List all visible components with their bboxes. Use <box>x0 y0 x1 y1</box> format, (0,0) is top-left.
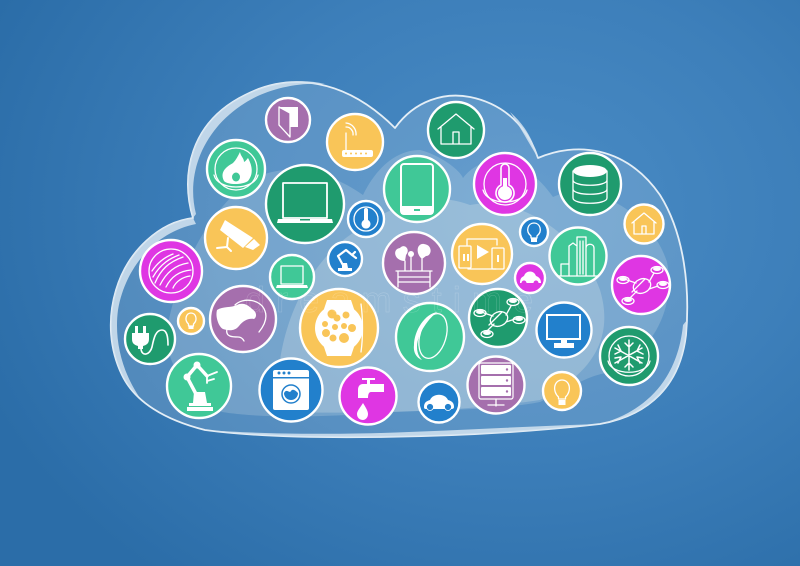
icon: VR headset <box>210 286 276 352</box>
icon: bulb yellow right <box>543 372 581 410</box>
icon: car blue <box>418 382 460 422</box>
icon: water tap <box>340 368 396 424</box>
icon: washing machine <box>260 358 322 422</box>
icon: robot arm teal <box>167 354 231 418</box>
icon: flame button <box>207 140 265 198</box>
icon: door <box>266 98 310 142</box>
icon: security camera <box>205 207 267 269</box>
icon: ring lens <box>396 303 464 371</box>
icon: smartwatch <box>300 289 378 367</box>
icon: media devices <box>452 224 512 284</box>
icon: small house <box>624 204 664 244</box>
icon: small car magenta <box>515 263 545 293</box>
cloud outline <box>111 82 687 437</box>
icon: robot arm blue <box>328 242 362 276</box>
icon: snowflake button <box>600 327 658 385</box>
icon: thermometer magenta <box>474 153 536 215</box>
icon: drone magenta <box>612 256 670 314</box>
icon: server rack <box>468 356 524 414</box>
icon: laptop small <box>270 255 314 299</box>
cloud shape <box>111 81 687 437</box>
watermark text: dreamstime <box>245 279 535 320</box>
icon: monitor <box>536 302 592 358</box>
icon: database <box>559 153 621 215</box>
icon: bulb small yellow <box>178 308 204 334</box>
icon: laptop large <box>266 165 344 243</box>
icon: city buildings <box>550 228 606 284</box>
icon: drone green <box>469 289 527 347</box>
icon: radar <box>140 240 202 302</box>
icon: bulb blue <box>520 218 548 246</box>
icon: power plug <box>125 314 175 364</box>
icon: factory <box>383 232 445 294</box>
icon: router <box>327 114 383 170</box>
icon: tablet <box>384 156 450 222</box>
icon: thermometer blue <box>348 201 384 237</box>
icon: house <box>428 102 484 158</box>
